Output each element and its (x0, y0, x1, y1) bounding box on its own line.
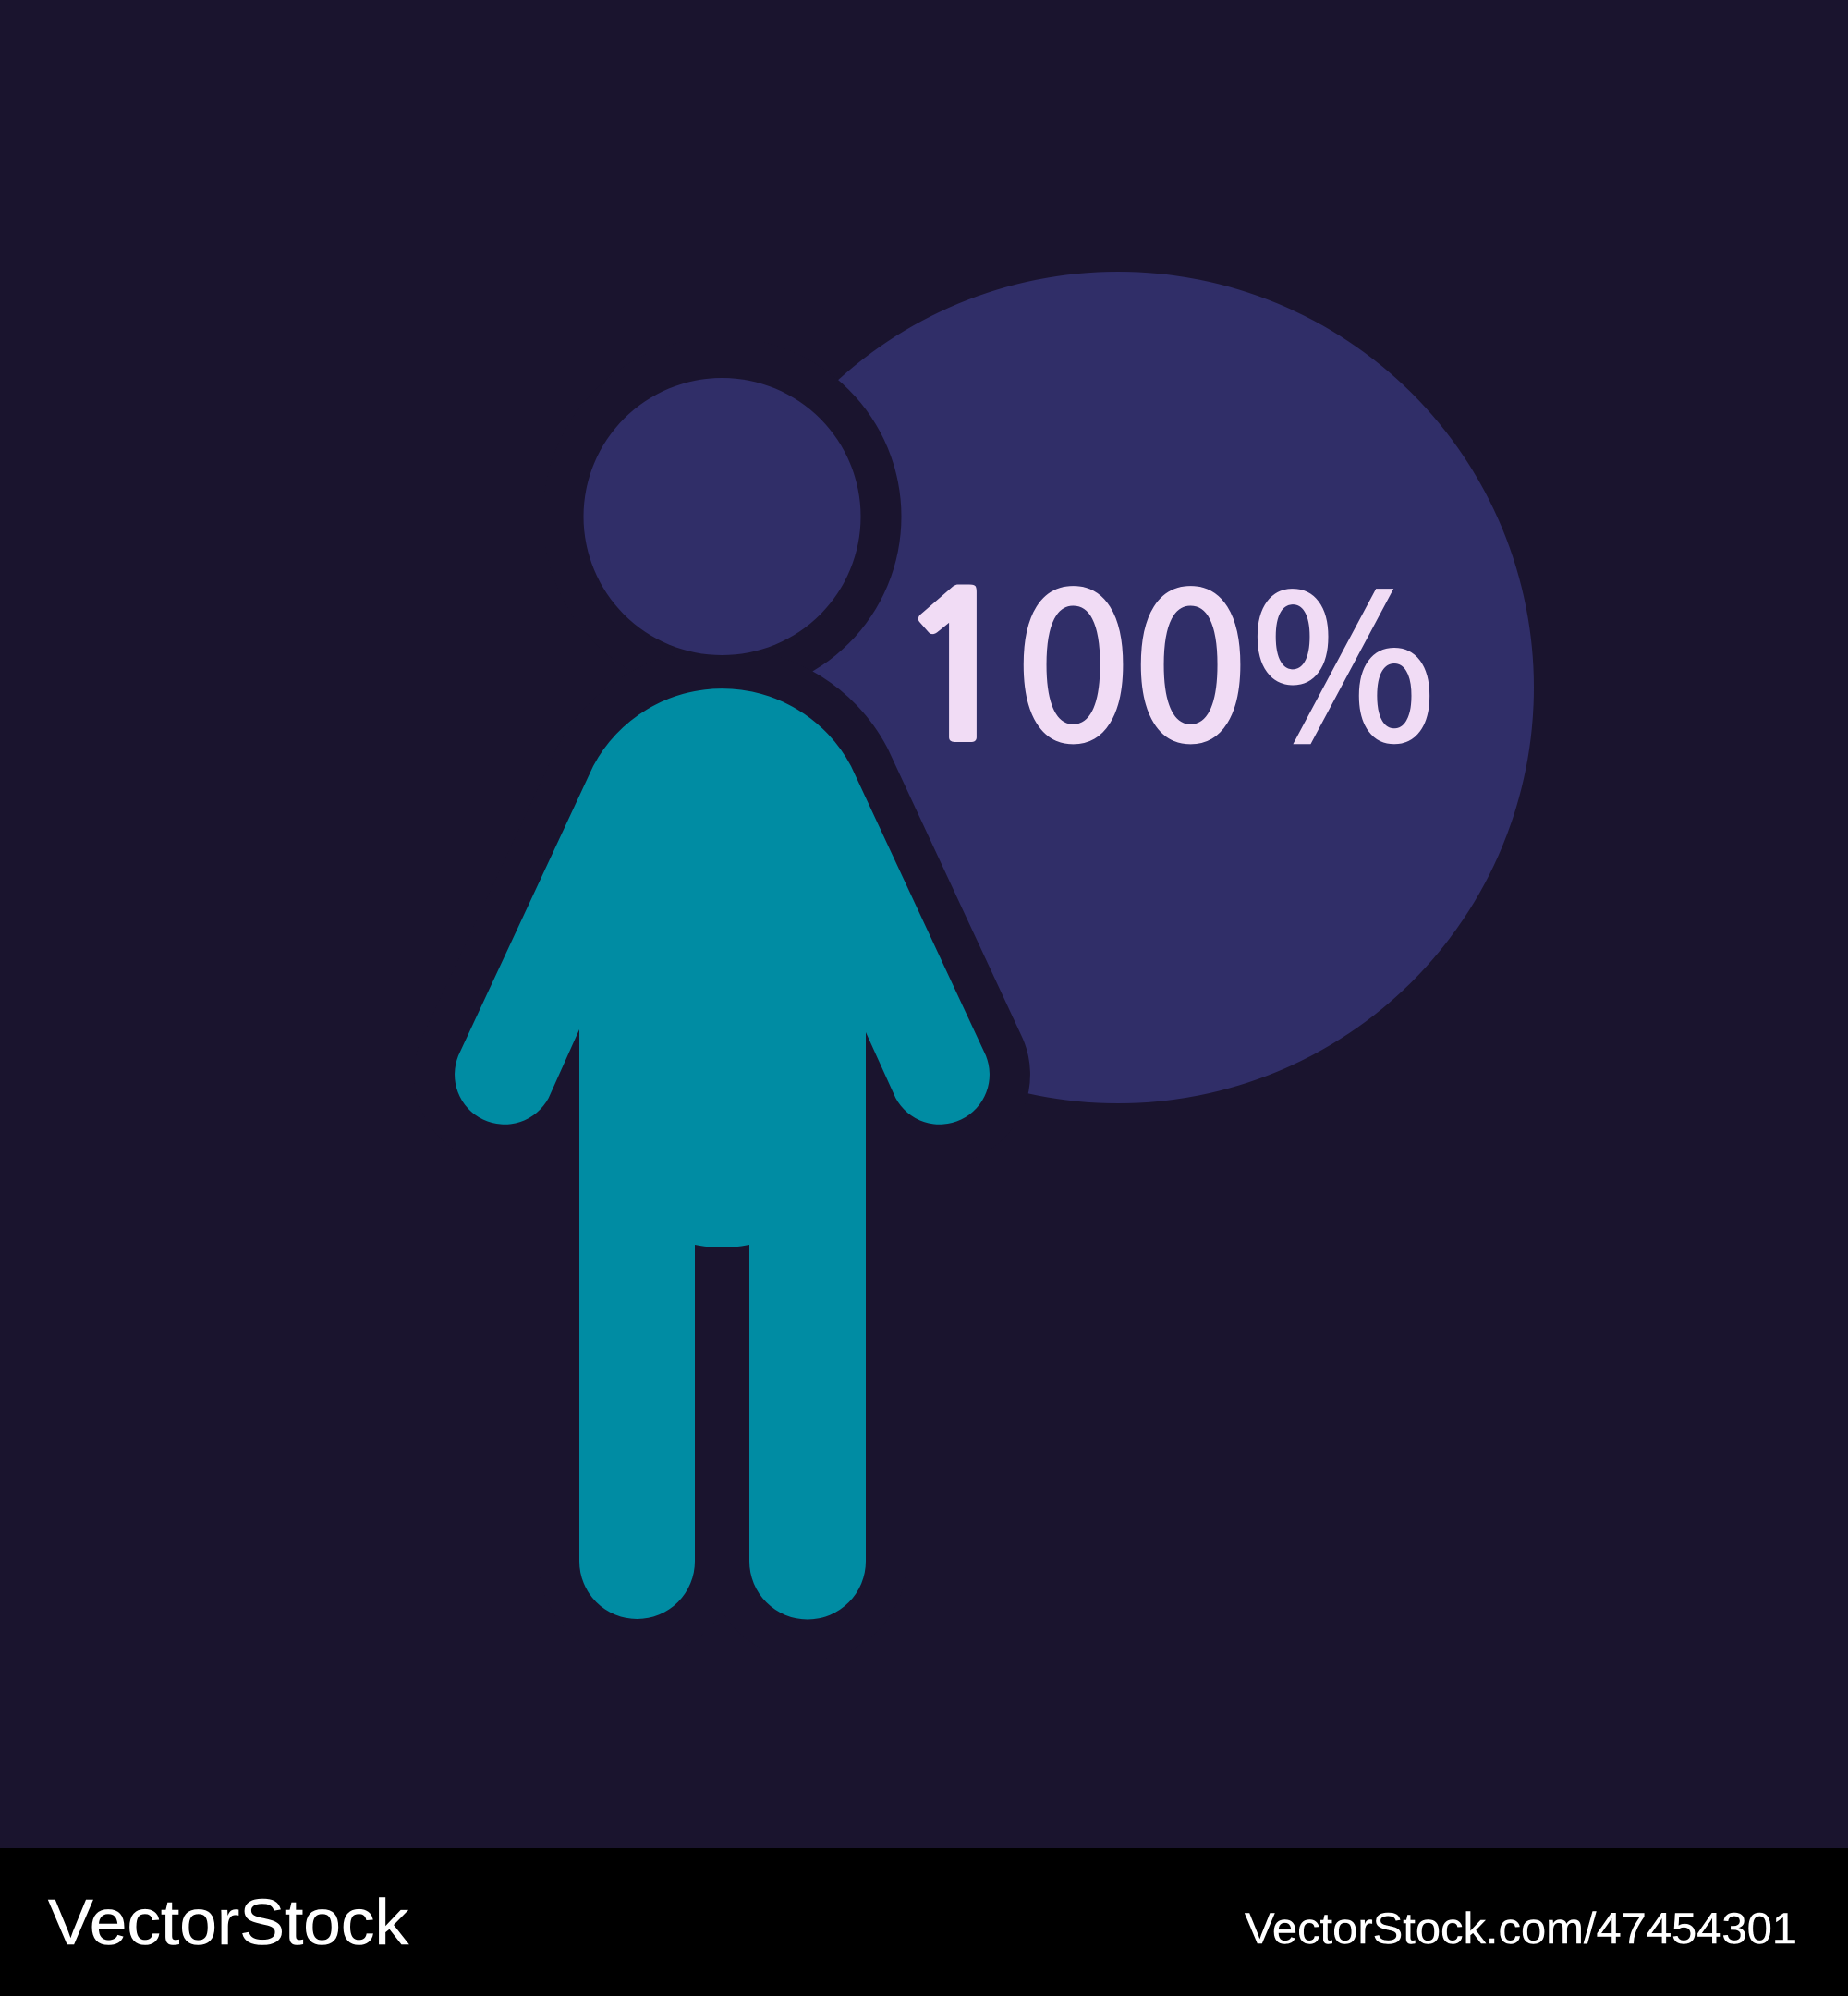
icon: person body (455, 688, 990, 1619)
percentage label (893, 498, 1435, 799)
percentage label: 0 (1015, 498, 1131, 799)
chart: percentage circle with person-shaped cutout (455, 272, 1534, 1619)
percentage label: 0 (1133, 498, 1248, 799)
percentage label: % (1252, 509, 1435, 797)
footer image URL text: VectorStock.com/47454301 (1245, 1904, 1797, 1953)
footer logo text: VectorStock (48, 1886, 409, 1958)
percentage label: 1 (893, 570, 1023, 770)
footer bar (0, 1848, 1848, 1996)
icon: person head (584, 378, 861, 655)
